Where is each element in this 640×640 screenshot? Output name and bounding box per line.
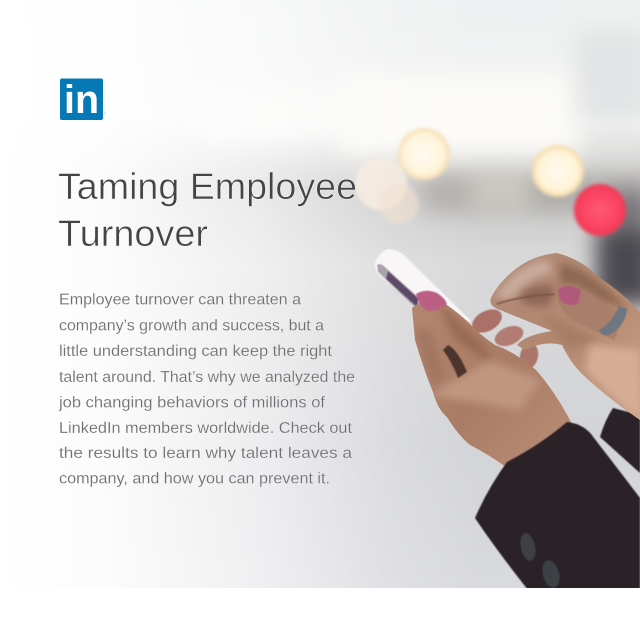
bokeh lights xyxy=(355,128,626,236)
body text: company’s growth and success, but a xyxy=(59,318,324,334)
body text: talent around. That’s why we analyzed the xyxy=(59,369,355,386)
icon: phone xyxy=(375,249,472,322)
blurred street shapes xyxy=(336,32,640,312)
title: Taming Employee xyxy=(58,166,357,207)
body text: job changing behaviors of millions of xyxy=(58,394,326,412)
right hand middle finger xyxy=(558,294,619,340)
right hand finger divide xyxy=(497,294,555,304)
icon: sleeve buttons xyxy=(520,533,560,588)
gap between fingers xyxy=(443,345,467,378)
title xyxy=(58,166,357,254)
icon: LinkedIn logo: in xyxy=(64,78,99,122)
icon: ring xyxy=(599,306,627,335)
photo: blurred street with hands holding a phone xyxy=(136,0,640,588)
left hand fingertips behind palm xyxy=(472,308,539,368)
title: Turnover xyxy=(58,213,208,254)
photo background gradient xyxy=(136,0,640,588)
left hand xyxy=(412,302,572,466)
body text: LinkedIn members worldwide. Check out xyxy=(59,420,353,437)
body text: company, and how you can prevent it. xyxy=(59,470,330,488)
body text xyxy=(58,292,355,488)
icon: painted thumbnail xyxy=(416,291,447,311)
icon: painted nail on right hand xyxy=(558,286,581,305)
body text: little understanding can keep the right xyxy=(59,343,333,360)
right sleeve xyxy=(600,408,640,473)
body text: the results to learn why talent leaves a xyxy=(59,445,352,462)
left sleeve with buttons xyxy=(475,422,640,590)
white left fade xyxy=(0,0,410,588)
right hand xyxy=(490,253,640,420)
body text: Employee turnover can threaten a xyxy=(59,292,301,308)
